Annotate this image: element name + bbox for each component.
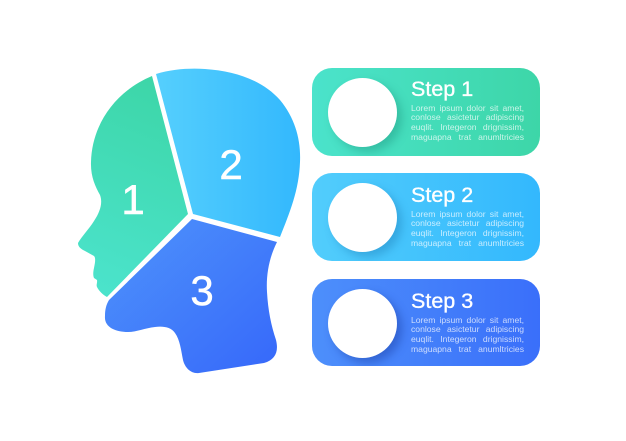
number 3: 3 (190, 267, 214, 314)
icon circle 2 (328, 183, 397, 252)
text block: step 2: euqlit. Integeron drignissim, (411, 228, 524, 238)
card: step 3 (312, 279, 540, 366)
icon circle 3 (328, 289, 397, 358)
card: step 2 (312, 173, 540, 261)
text block: step 2 (411, 208, 524, 248)
text block: step 3: euqlit. Integeron drignissim, (411, 334, 524, 344)
text block: step 3 (411, 314, 524, 354)
number 1: 1 (121, 176, 145, 223)
text block: step 1: maguapna trat anumltricies (411, 132, 524, 142)
text block: step 2: conlose asictetur adipiscing (411, 218, 524, 228)
number 2: 2 (219, 141, 243, 188)
head segment 2 (156, 69, 300, 237)
text block: step 2: Lorem ipsum dolor sit amet, (411, 208, 524, 218)
card: step 1 (312, 68, 540, 156)
text block: step 1 (411, 102, 524, 142)
head diagram (78, 68, 300, 374)
text block: step 3: conlose asictetur adipiscing (411, 324, 524, 334)
head segment 1 (78, 76, 188, 297)
text block: step 1: Lorem ipsum dolor sit amet, (411, 102, 524, 112)
heading: step 2: Step 2 (411, 183, 473, 207)
text block: step 3: maguapna trat anumltricies (411, 344, 524, 354)
text block: step 3: Lorem ipsum dolor sit amet, (411, 314, 524, 324)
text block: step 2: maguapna trat anumltricies (411, 238, 524, 248)
heading: step 1: Step 1 (411, 77, 473, 101)
head segment 3 (105, 219, 277, 373)
text block: step 1: conlose asictetur adipiscing (411, 112, 524, 122)
icon circle 1 (328, 78, 397, 147)
heading: step 3: Step 3 (411, 289, 473, 313)
text block: step 1: euqlit. Integeron drignissim, (411, 122, 524, 132)
